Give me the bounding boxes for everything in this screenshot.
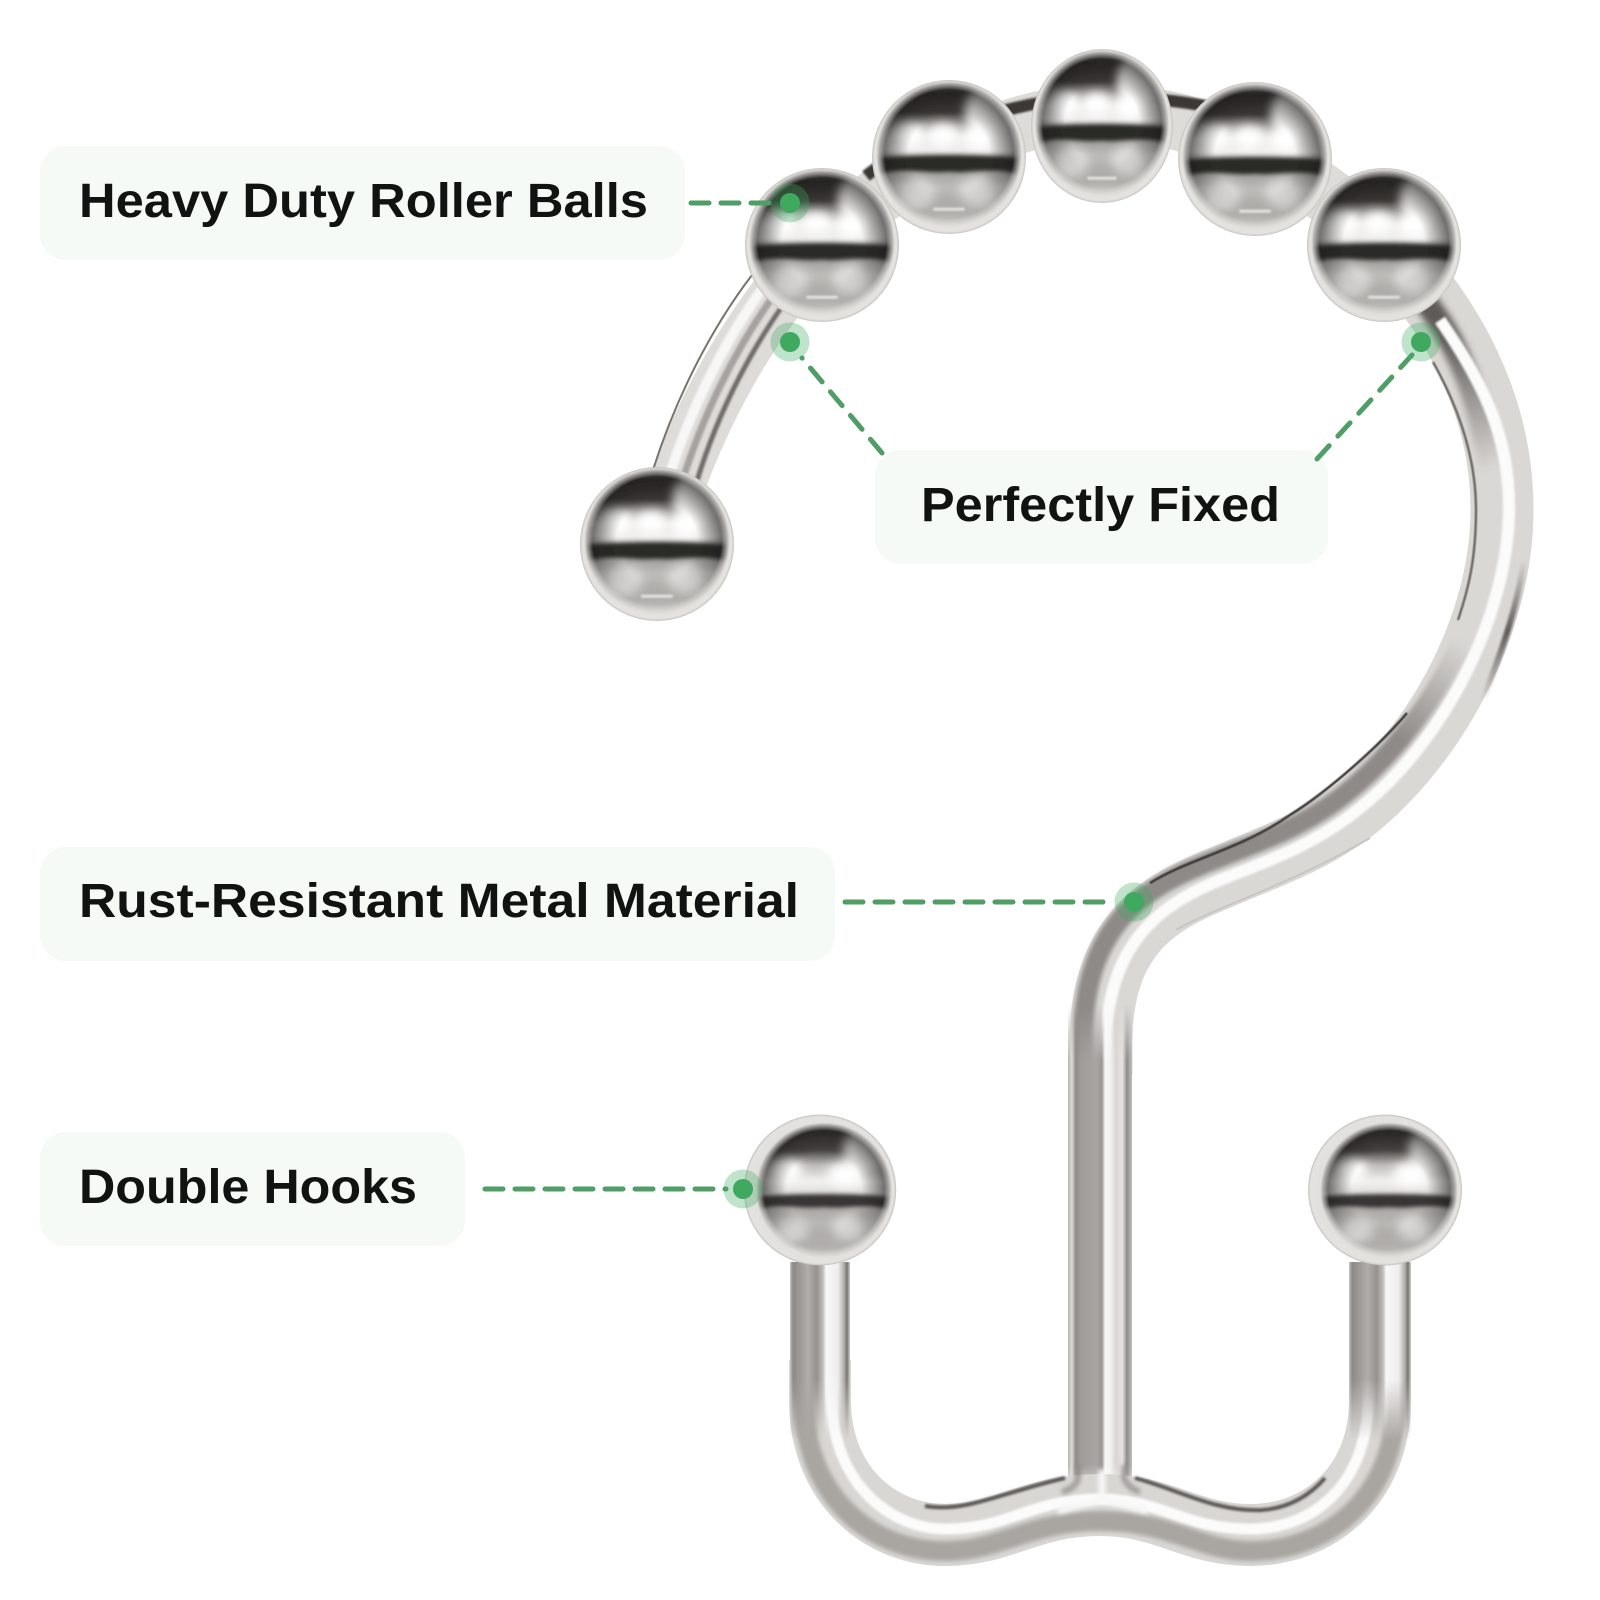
right hook ball xyxy=(1308,1115,1463,1266)
double hook base xyxy=(804,1360,1396,1551)
marker halo xyxy=(1114,882,1154,922)
marker halo xyxy=(1402,322,1440,362)
roller ball 1 xyxy=(745,168,899,322)
dashed line xyxy=(1317,355,1412,459)
label text: Perfectly Fixed xyxy=(921,479,1280,532)
marker dot xyxy=(1124,892,1144,912)
marker dot xyxy=(780,332,800,352)
roller ball 3 xyxy=(1031,49,1173,203)
hook arc: curved rail behind the roller balls xyxy=(653,97,1384,544)
right hook arm xyxy=(1349,1262,1411,1440)
end ball xyxy=(580,467,734,621)
marker halo xyxy=(770,184,810,222)
dashed line xyxy=(691,200,770,206)
marker halo xyxy=(724,1170,762,1208)
shower hook illustration xyxy=(580,49,1524,1551)
callout leader: double hooks xyxy=(485,1170,762,1208)
label: Double Hooks xyxy=(40,1132,465,1246)
label background xyxy=(40,847,835,961)
label text: Double Hooks xyxy=(79,1161,417,1214)
label: Rust-Resistant Metal Material xyxy=(40,847,835,961)
dashed line xyxy=(485,1186,726,1192)
roller ball 5 xyxy=(1307,168,1461,322)
label text: Rust-Resistant Metal Material xyxy=(79,875,799,928)
callout leader: fixed left xyxy=(770,322,882,453)
callout leader: metal material xyxy=(845,882,1154,922)
marker halo xyxy=(770,322,810,362)
label text: Heavy Duty Roller Balls xyxy=(79,175,648,228)
left hook arm xyxy=(790,1262,850,1440)
callout leader: fixed right xyxy=(1317,322,1440,459)
label background xyxy=(875,450,1328,564)
callout leader: roller balls xyxy=(691,184,810,222)
label background xyxy=(40,146,685,260)
label: Heavy Duty Roller Balls xyxy=(40,146,685,260)
dashed line xyxy=(845,900,1105,904)
hook body: S-curve from the rail down to the stem xyxy=(1083,245,1524,1075)
roller ball 4 xyxy=(1178,82,1332,236)
label: Perfectly Fixed xyxy=(875,450,1328,564)
marker dot xyxy=(780,193,800,213)
marker dot xyxy=(733,1179,753,1199)
left hook ball xyxy=(744,1115,897,1266)
label background xyxy=(40,1132,465,1246)
dashed line xyxy=(802,358,882,453)
roller ball 2 xyxy=(872,80,1026,234)
marker dot xyxy=(1411,332,1431,352)
hook stem xyxy=(1068,1005,1132,1505)
